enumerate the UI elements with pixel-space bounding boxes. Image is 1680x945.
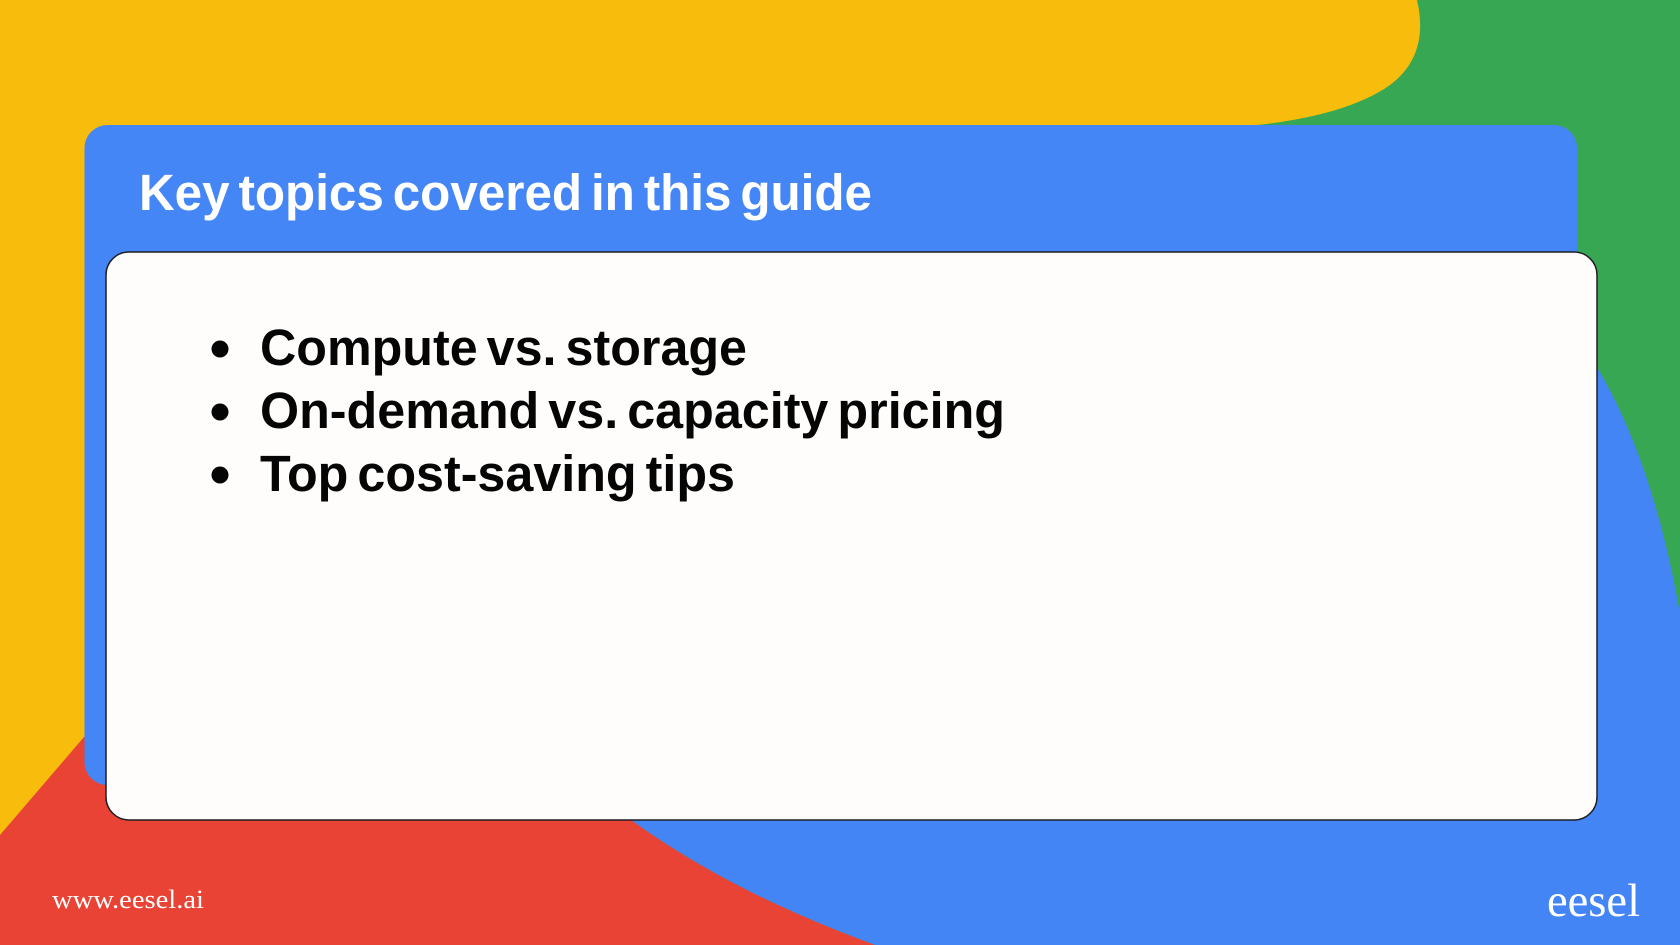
bullet item: top cost-saving tips: Top cost-saving tips: [260, 445, 735, 502]
bullet item: on-demand vs capacity pricing: On-demand vs. capacity pricing: [260, 382, 1005, 439]
background: red shape: [0, 640, 875, 945]
blue header panel: [84, 125, 1577, 785]
white content card: [106, 252, 1597, 820]
background: yellow shape: [0, 0, 1420, 835]
background: blue shape: [631, 300, 1680, 945]
bullet item: compute vs storage: Compute vs. storage: [260, 319, 747, 376]
footer brand wordmark: eesel: [1547, 875, 1640, 927]
bullet list: [212, 319, 1005, 502]
heading: Key topics covered in this guide: [139, 164, 872, 221]
footer website url: www.eesel.ai: [52, 885, 204, 914]
